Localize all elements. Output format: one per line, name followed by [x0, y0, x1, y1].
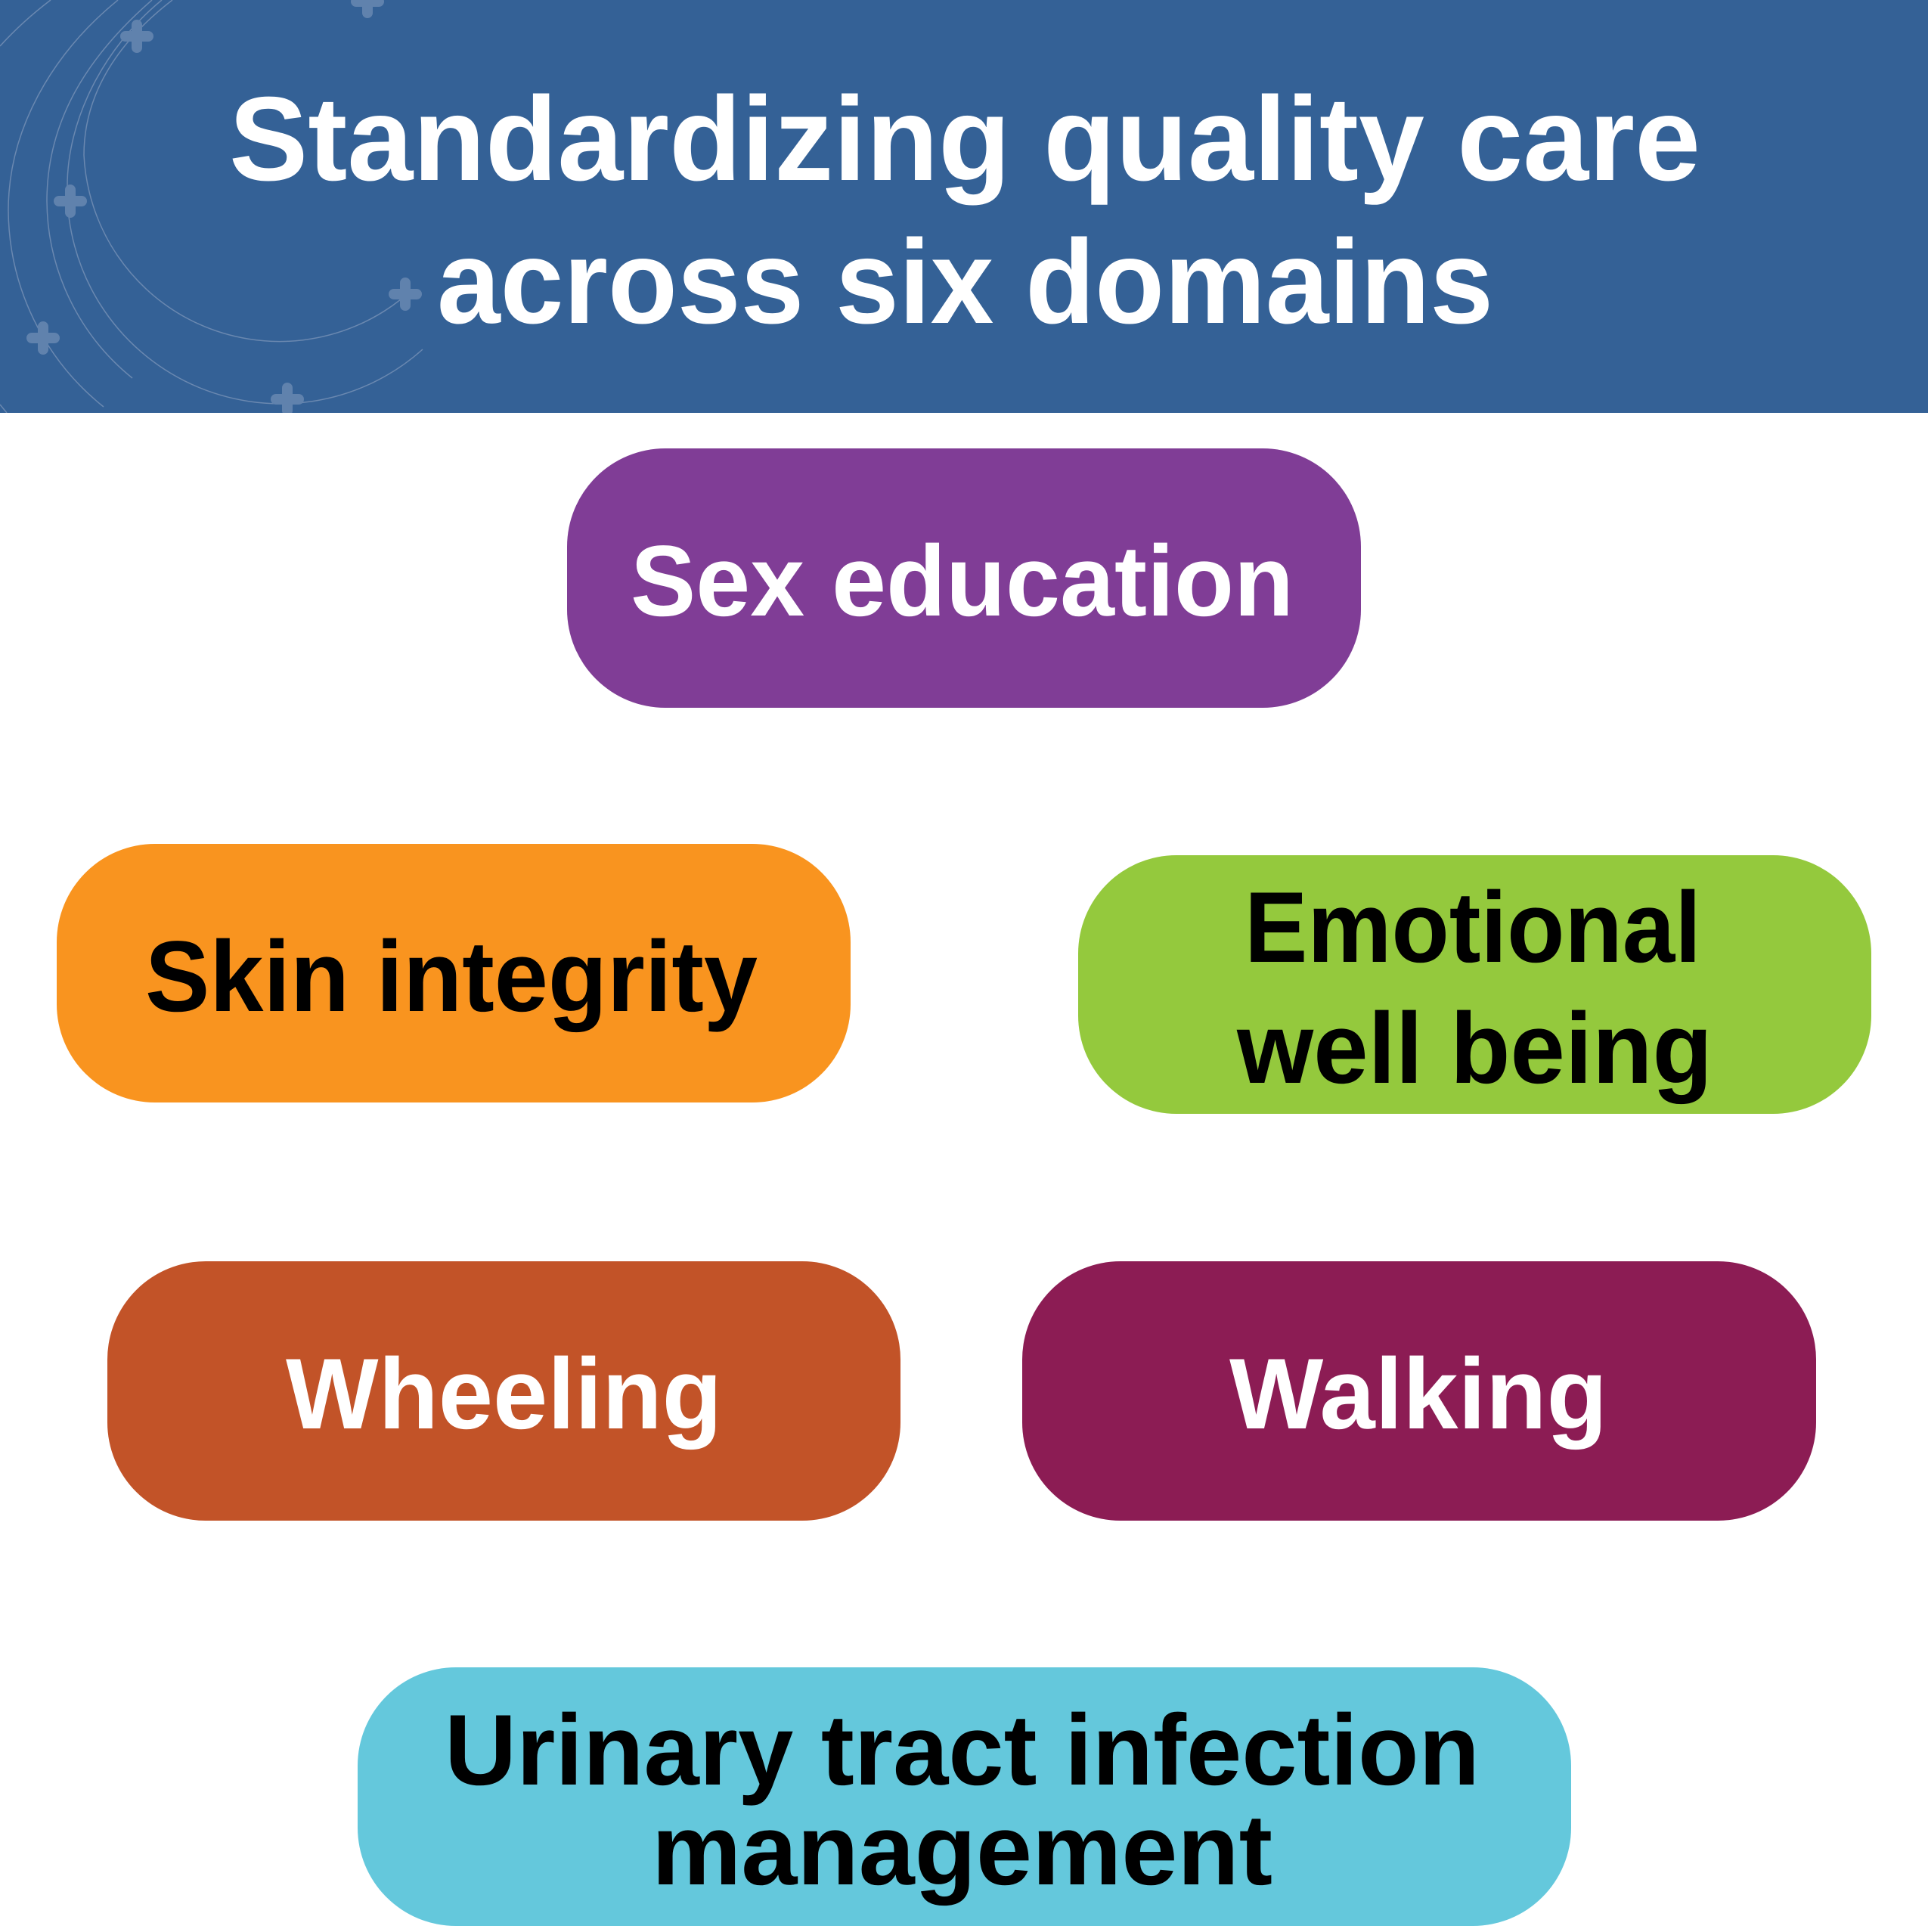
panel: Emotional well being [1078, 855, 1871, 1114]
decorative arcs [0, 0, 423, 413]
title: Standardizing quality care [229, 73, 1700, 206]
panel: Sex education [567, 448, 1361, 708]
panel: Urinary tract infection management: management [652, 1794, 1272, 1906]
title [233, 94, 1697, 324]
panel: Emotional well being: well being [1236, 993, 1713, 1105]
panel: Emotional well being: Emotional [1245, 872, 1701, 984]
panel: Wheeling [107, 1261, 900, 1521]
panel: Wheeling: Wheeling [286, 1338, 722, 1450]
icons: plus signs [32, 0, 417, 411]
title: across six domains [437, 216, 1493, 349]
panel: header banner [0, 0, 1928, 413]
panel: Skin integrity [57, 844, 851, 1102]
panel: Urinary tract infection management: Urinary tract infection [445, 1695, 1480, 1806]
panel: Walking [1022, 1261, 1816, 1521]
panel: Sex education: Sex education [631, 526, 1294, 637]
panel: Urinary tract infection management [358, 1667, 1571, 1926]
panel: Walking: Walking [1229, 1338, 1607, 1450]
panel: Skin integrity: Skin integrity [145, 921, 758, 1033]
